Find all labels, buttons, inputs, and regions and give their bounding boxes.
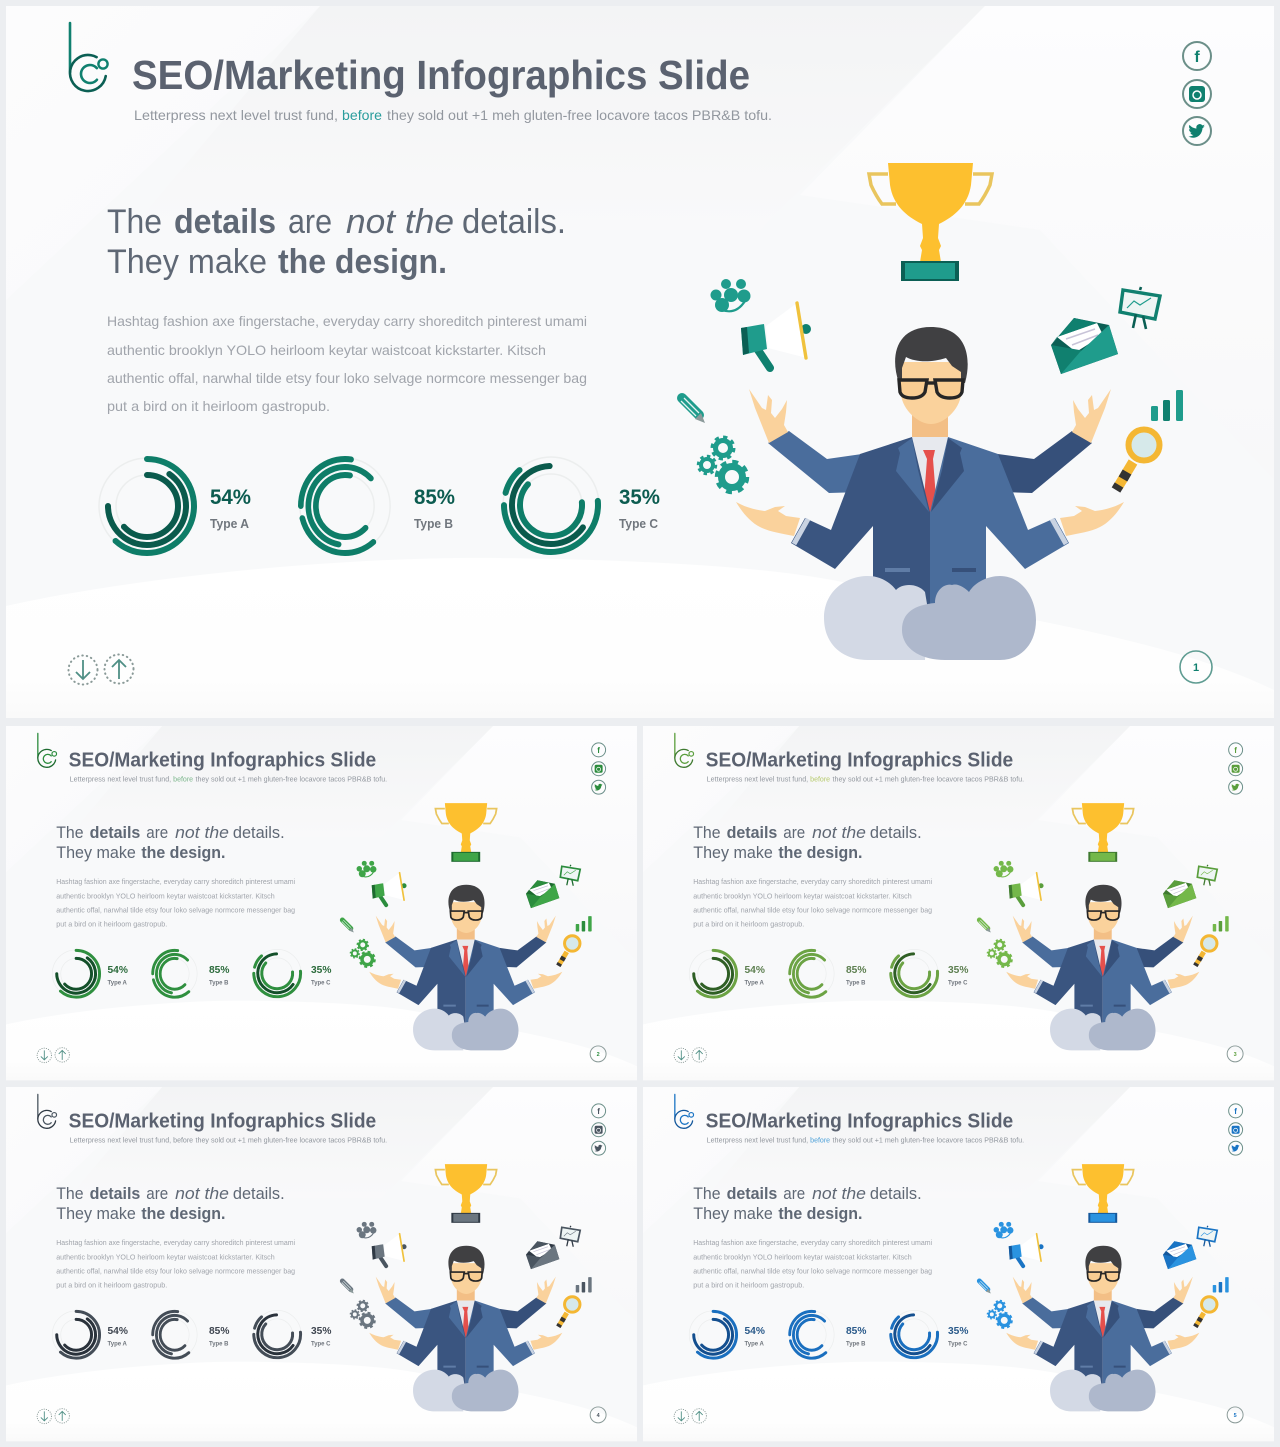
logo xyxy=(36,1094,57,1130)
heading: are xyxy=(783,823,805,842)
social icons xyxy=(1229,743,1243,794)
chart labels: 85% xyxy=(209,1326,229,1337)
heading: details. xyxy=(233,1184,285,1203)
subtitle xyxy=(70,777,387,784)
chart labels: 54% xyxy=(210,486,251,509)
illustration: businessman with icons xyxy=(342,1164,592,1411)
body text: Hashtag fashion axe fingerstache, everyday carry shoreditch pinterest umami xyxy=(693,1240,933,1247)
heading: The xyxy=(56,1184,84,1203)
chart labels: 35% xyxy=(948,1326,968,1337)
icon: magnifier xyxy=(1116,430,1160,490)
heading: details xyxy=(727,1184,777,1203)
chart labels: Type C xyxy=(311,1341,331,1348)
body text: put a bird on it heirloom gastropub. xyxy=(693,1283,804,1290)
page number xyxy=(590,1046,606,1062)
heading: details. xyxy=(233,823,285,842)
icon: gears xyxy=(698,437,747,492)
navigation arrows xyxy=(674,1048,706,1063)
heading: The xyxy=(693,823,721,842)
chart labels: Type A xyxy=(210,516,250,531)
heading: are xyxy=(288,203,332,241)
chart labels: Type B xyxy=(846,1341,866,1348)
subtitle: Letterpress next level trust fund, xyxy=(134,107,338,123)
heading: are xyxy=(783,1184,805,1203)
subtitle xyxy=(707,1138,1024,1145)
subtitle: Letterpress next level trust fund, xyxy=(707,777,808,784)
body text: put a bird on it heirloom gastropub. xyxy=(693,922,804,929)
slide background xyxy=(643,1087,1274,1441)
heading: The xyxy=(693,1184,721,1203)
subtitle: they sold out +1 meh gluten-free locavore tacos PBR&B tofu. xyxy=(833,777,1024,784)
subtitle: before xyxy=(810,1138,830,1145)
icon: team xyxy=(710,279,750,312)
chart labels xyxy=(107,1326,331,1348)
heading: They make xyxy=(693,843,773,862)
title: SEO/Marketing Infographics Slide xyxy=(706,749,1013,771)
heading: not the xyxy=(175,1184,229,1203)
page number xyxy=(1227,1046,1243,1062)
body text: put a bird on it heirloom gastropub. xyxy=(107,398,330,414)
donut charts xyxy=(93,440,609,572)
navigation arrows xyxy=(674,1409,706,1424)
chart labels: Type C xyxy=(948,1341,968,1348)
chart labels: Type A xyxy=(744,980,764,987)
subtitle: before xyxy=(173,1138,193,1145)
body text xyxy=(693,879,933,929)
page number: 4 xyxy=(597,1413,601,1419)
page number: 5 xyxy=(1234,1413,1237,1419)
page number: 1 xyxy=(1193,662,1199,674)
icon: envelope xyxy=(1051,318,1118,374)
body text: authentic offal, narwhal tilde etsy four loko selvage normcore messenger bag xyxy=(107,370,587,386)
subtitle: Letterpress next level trust fund, xyxy=(70,1138,171,1145)
body text: authentic brooklyn YOLO heirloom keytar waistcoat kickstarter. Kitsch xyxy=(693,894,912,901)
illustration: businessman with icons xyxy=(979,803,1229,1050)
subtitle: they sold out +1 meh gluten-free locavore tacos PBR&B tofu. xyxy=(387,107,772,123)
chart labels: Type A xyxy=(107,980,127,987)
chart labels: 85% xyxy=(846,1326,866,1337)
body text xyxy=(107,313,587,414)
subtitle: before xyxy=(810,777,830,784)
logo xyxy=(36,733,57,769)
panel: main teal slide xyxy=(6,6,1274,718)
body text xyxy=(56,879,296,929)
donut charts xyxy=(686,941,943,1007)
title: SEO/Marketing Infographics Slide xyxy=(706,1110,1013,1132)
heading: are xyxy=(146,823,168,842)
body text: authentic offal, narwhal tilde etsy four loko selvage normcore messenger bag xyxy=(693,908,932,915)
heading: details. xyxy=(870,1184,922,1203)
illustration: businessman with icons xyxy=(342,803,592,1050)
body text: authentic offal, narwhal tilde etsy four loko selvage normcore messenger bag xyxy=(693,1269,932,1276)
heading: the design. xyxy=(778,1204,862,1223)
chart labels: 85% xyxy=(846,965,866,976)
chart labels: 85% xyxy=(209,965,229,976)
logo xyxy=(673,733,694,769)
icon: megaphone xyxy=(741,303,811,368)
heading xyxy=(56,1184,285,1223)
slide background xyxy=(6,6,1274,718)
social icons: f xyxy=(1194,49,1200,66)
body text: authentic brooklyn YOLO heirloom keytar waistcoat kickstarter. Kitsch xyxy=(56,894,275,901)
chart labels: Type C xyxy=(619,516,659,531)
body text: authentic offal, narwhal tilde etsy four loko selvage normcore messenger bag xyxy=(56,1269,295,1276)
figure: clouds xyxy=(824,576,1036,660)
page number xyxy=(1227,1407,1243,1423)
heading: details. xyxy=(870,823,922,842)
title: SEO/Marketing Infographics Slide xyxy=(69,749,376,771)
illustration: businessman with icons xyxy=(979,1164,1229,1411)
heading xyxy=(693,823,922,862)
chart labels: Type B xyxy=(209,980,229,987)
heading: not the xyxy=(812,1184,866,1203)
navigation arrows xyxy=(68,654,134,684)
heading: details. xyxy=(462,203,566,241)
heading: the design. xyxy=(141,1204,225,1223)
panel: grey slide xyxy=(6,1087,637,1441)
heading xyxy=(56,823,285,862)
body text: authentic brooklyn YOLO heirloom keytar waistcoat kickstarter. Kitsch xyxy=(107,342,546,358)
chart labels: Type C xyxy=(948,980,968,987)
body text: Hashtag fashion axe fingerstache, everyday carry shoreditch pinterest umami xyxy=(56,1240,296,1247)
page number xyxy=(1180,651,1212,683)
heading: not the xyxy=(175,823,229,842)
page number: 3 xyxy=(1234,1052,1237,1058)
chart labels xyxy=(210,486,660,531)
social icons xyxy=(592,1104,606,1155)
figure: head and neck xyxy=(895,327,968,441)
body text: authentic brooklyn YOLO heirloom keytar waistcoat kickstarter. Kitsch xyxy=(693,1255,912,1262)
social icons xyxy=(1183,42,1211,145)
heading: details xyxy=(174,203,276,241)
chart labels: 54% xyxy=(744,1326,765,1337)
heading: details xyxy=(90,1184,140,1203)
subtitle: before xyxy=(173,777,193,784)
chart labels: 54% xyxy=(107,965,128,976)
slide background xyxy=(6,1087,637,1441)
heading: They make xyxy=(56,843,136,862)
heading: The xyxy=(107,203,162,241)
figure: upper arms xyxy=(736,389,1124,536)
subtitle: they sold out +1 meh gluten-free locavore tacos PBR&B tofu. xyxy=(196,777,387,784)
title: SEO/Marketing Infographics Slide xyxy=(69,1110,376,1132)
illustration: businessman with icons xyxy=(681,163,1183,660)
page number: 2 xyxy=(597,1052,600,1058)
panel: lime green slide xyxy=(643,726,1274,1080)
heading: the design. xyxy=(778,843,862,862)
navigation arrows xyxy=(37,1048,69,1063)
subtitle: Letterpress next level trust fund, xyxy=(707,1138,808,1145)
page number xyxy=(590,1407,606,1423)
subtitle: before xyxy=(342,107,382,123)
heading xyxy=(693,1184,922,1223)
body text: put a bird on it heirloom gastropub. xyxy=(56,922,167,929)
chart labels: Type C xyxy=(311,980,331,987)
chart labels: Type A xyxy=(107,1341,127,1348)
body text: Hashtag fashion axe fingerstache, everyday carry shoreditch pinterest umami xyxy=(56,879,296,886)
chart labels xyxy=(744,1326,968,1348)
heading xyxy=(107,203,566,281)
subtitle xyxy=(134,107,772,123)
slide background xyxy=(6,726,637,1080)
heading: not the xyxy=(346,203,454,241)
navigation arrows xyxy=(37,1409,69,1424)
chart labels: 35% xyxy=(619,486,660,509)
heading: The xyxy=(56,823,84,842)
subtitle: Letterpress next level trust fund, xyxy=(70,777,171,784)
subtitle: they sold out +1 meh gluten-free locavore tacos PBR&B tofu. xyxy=(833,1138,1024,1145)
body text: authentic brooklyn YOLO heirloom keytar waistcoat kickstarter. Kitsch xyxy=(56,1255,275,1262)
body text xyxy=(693,1240,933,1290)
subtitle xyxy=(707,777,1024,784)
body text: Hashtag fashion axe fingerstache, everyday carry shoreditch pinterest umami xyxy=(107,313,587,329)
chart labels xyxy=(744,965,968,987)
chart labels: 85% xyxy=(414,486,455,509)
slide background xyxy=(643,726,1274,1080)
social icons xyxy=(1229,1104,1243,1155)
icon: presentation board xyxy=(1120,287,1160,329)
logo xyxy=(67,23,109,94)
donut charts xyxy=(49,941,306,1007)
donut charts xyxy=(49,1302,306,1368)
chart labels: 35% xyxy=(948,965,968,976)
heading: the design. xyxy=(278,243,447,281)
logo xyxy=(673,1094,694,1130)
icon: trophy xyxy=(869,163,992,281)
heading: are xyxy=(146,1184,168,1203)
icon: pencil xyxy=(681,398,705,423)
chart labels: Type B xyxy=(414,516,453,531)
chart labels: 35% xyxy=(311,1326,331,1337)
heading: They make xyxy=(107,243,267,281)
heading: not the xyxy=(812,823,866,842)
body text: authentic offal, narwhal tilde etsy four loko selvage normcore messenger bag xyxy=(56,908,295,915)
chart labels: Type B xyxy=(209,1341,229,1348)
icon: bar chart xyxy=(1151,390,1183,421)
panel: green slide xyxy=(6,726,637,1080)
body text: put a bird on it heirloom gastropub. xyxy=(56,1283,167,1290)
panel: blue slide xyxy=(643,1087,1274,1441)
chart labels xyxy=(107,965,331,987)
heading: They make xyxy=(693,1204,773,1223)
heading: details xyxy=(727,823,777,842)
heading: details xyxy=(90,823,140,842)
chart labels: Type A xyxy=(744,1341,764,1348)
subtitle xyxy=(70,1138,387,1145)
title: SEO/Marketing Infographics Slide xyxy=(132,52,750,98)
chart labels: 35% xyxy=(311,965,331,976)
chart labels: Type B xyxy=(846,980,866,987)
donut charts xyxy=(686,1302,943,1368)
heading: They make xyxy=(56,1204,136,1223)
chart labels: 54% xyxy=(107,1326,128,1337)
social icons xyxy=(592,743,606,794)
heading: the design. xyxy=(141,843,225,862)
body text xyxy=(56,1240,296,1290)
figure: jacket xyxy=(791,437,1069,606)
chart labels: 54% xyxy=(744,965,765,976)
body text: Hashtag fashion axe fingerstache, everyday carry shoreditch pinterest umami xyxy=(693,879,933,886)
subtitle: they sold out +1 meh gluten-free locavore tacos PBR&B tofu. xyxy=(196,1138,387,1145)
